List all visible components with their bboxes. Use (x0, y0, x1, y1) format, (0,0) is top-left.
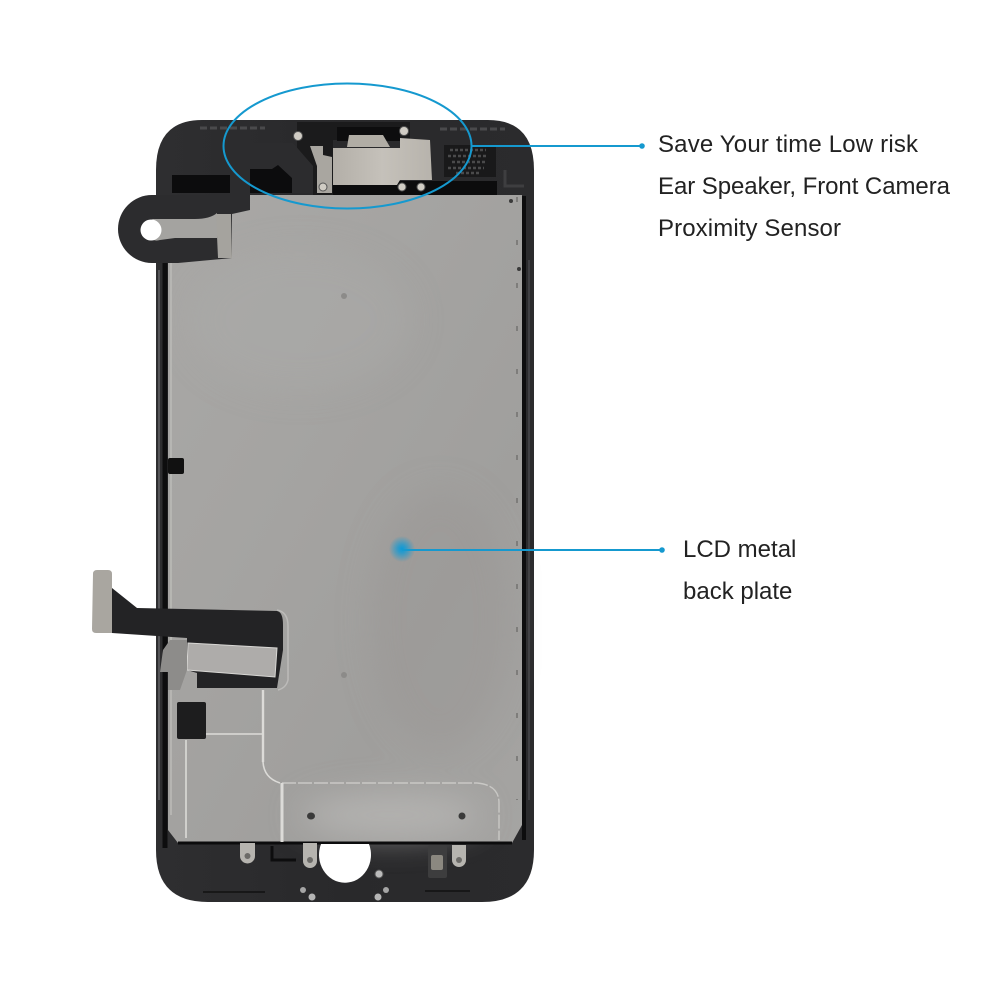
callout dot (639, 143, 645, 149)
callout text (658, 131, 951, 242)
plate shading (190, 250, 510, 837)
right frame clip (505, 170, 524, 186)
plate dot (659, 547, 665, 553)
right edge gloss (528, 260, 530, 800)
phone frame (156, 120, 534, 902)
callout ellipse (224, 84, 472, 208)
plate mounting holes (307, 199, 521, 820)
left window cut-out (172, 175, 230, 193)
bracket screws (294, 126, 425, 191)
connector side bracket (160, 640, 187, 690)
plate text (683, 536, 796, 605)
flex outline halo (277, 610, 288, 690)
callout: back plate (389, 536, 796, 605)
bottom plate edge (178, 842, 512, 844)
black adhesive chip (177, 702, 206, 739)
earpiece flex cable (118, 143, 313, 263)
callout leader line (471, 145, 641, 147)
earpiece black strip (337, 127, 400, 141)
inner right rail (522, 196, 526, 840)
bottom brackets and screws (203, 843, 470, 900)
flex loop light area (145, 213, 217, 241)
serial code patch (444, 145, 496, 177)
left plate margin strip (170, 260, 172, 815)
flex cable window (250, 165, 292, 193)
inner left rail (162, 196, 168, 848)
flex loop hole (140, 220, 162, 240)
left side black clip (168, 458, 184, 474)
lower flex cable (112, 588, 283, 688)
ear speaker grille (347, 135, 390, 147)
earpiece cavity (297, 122, 410, 195)
flex metal stiffener (216, 214, 232, 258)
callout text: Ear Speaker, Front Camera (658, 173, 951, 200)
top speaker mesh marks (200, 128, 505, 129)
ear speaker bracket left (310, 146, 332, 193)
plate seam lines (186, 690, 499, 842)
flex connector plate (187, 643, 277, 677)
plate text: LCD metal (683, 536, 796, 563)
home button cut-out (319, 844, 371, 883)
glow marker (389, 536, 415, 562)
ear speaker bracket (333, 138, 432, 185)
lower window cut-out (330, 181, 497, 195)
plate leader line (402, 549, 661, 551)
left edge gloss (158, 270, 160, 800)
phone display assembly (92, 120, 534, 902)
metal back plate (168, 195, 522, 843)
callout text: Proximity Sensor (658, 215, 841, 242)
callout text: Save Your time Low risk (658, 131, 919, 158)
plate text: back plate (683, 578, 792, 605)
serial code speckle (448, 150, 488, 173)
plate right edge detail (516, 197, 518, 800)
callout: top components (224, 84, 951, 242)
lower flex metal tab (92, 570, 112, 633)
